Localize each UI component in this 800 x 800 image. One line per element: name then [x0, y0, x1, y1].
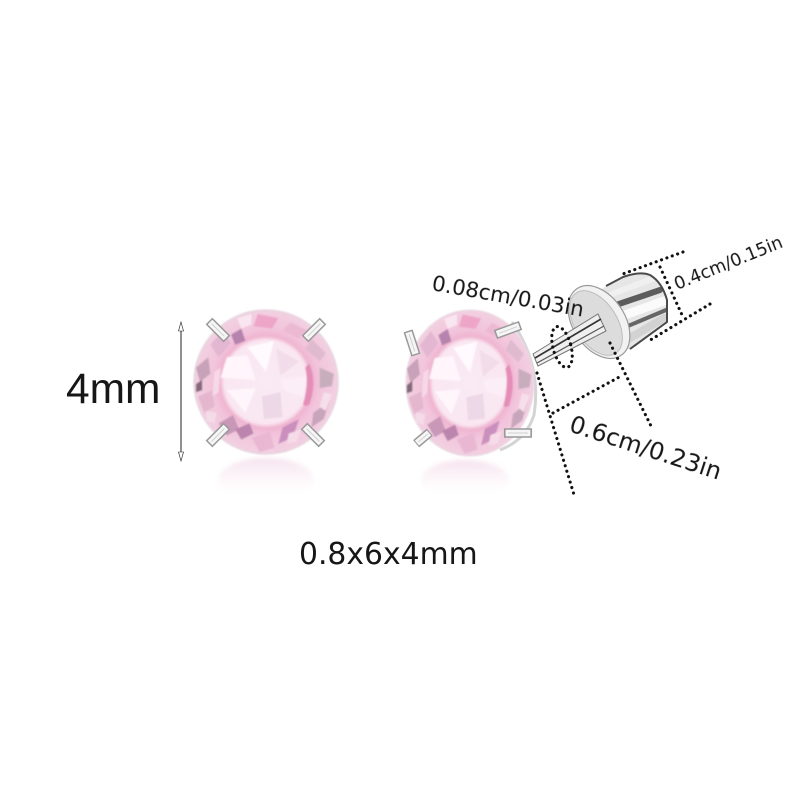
dimension lines: [537, 252, 710, 498]
back: barrel: [600, 273, 667, 350]
label: back diameter: 0.4cm/0.15in: [671, 233, 786, 295]
setting rim: [500, 322, 536, 450]
prongs: right: [404, 322, 531, 446]
post: [533, 314, 606, 366]
prongs: left: [207, 319, 325, 446]
label: post length: 0.6cm/0.23in: [566, 410, 725, 486]
gem: right: [406, 310, 534, 456]
label: size summary: 0.8x6x4mm: [299, 537, 478, 572]
right earring side view: [404, 273, 667, 500]
label: 4mm: 4mm: [66, 366, 160, 413]
back: disc: [555, 274, 643, 370]
reflection: left gem: [218, 458, 314, 502]
label: post diameter: 0.08cm/0.03in: [430, 271, 586, 323]
left earring front view: [194, 310, 338, 502]
reflection: right gem: [421, 460, 509, 500]
arrow: height dimension: [178, 322, 184, 461]
gem: left: [194, 310, 338, 454]
